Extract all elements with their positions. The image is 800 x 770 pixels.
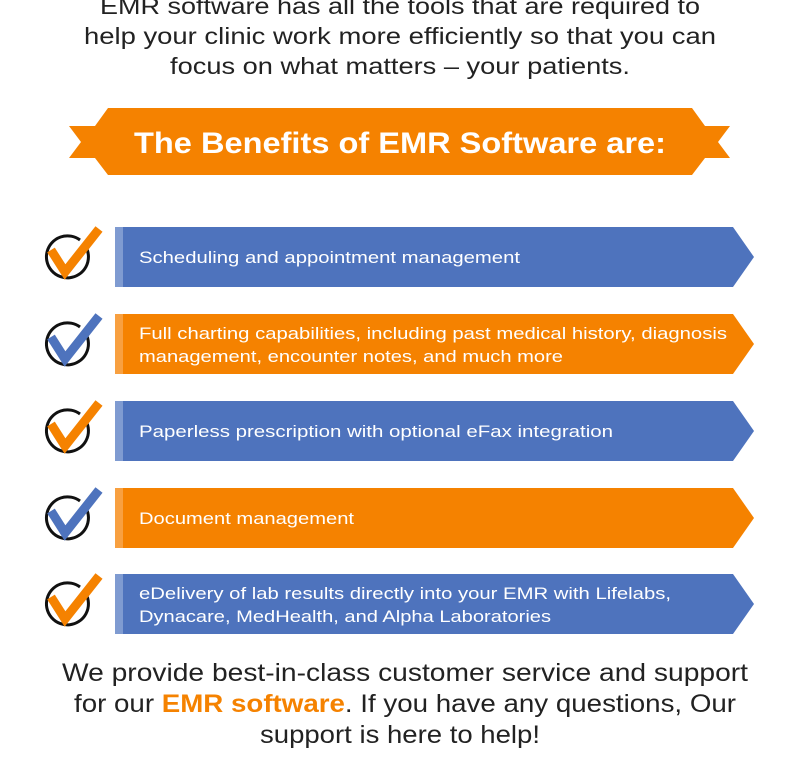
closing text: for our EMR software . If you have any questions, Our	[74, 690, 736, 718]
icon: check blue	[46, 316, 99, 365]
item 2	[46, 314, 754, 374]
item 2: Full charting capabilities, including past medical history, diagnosis	[139, 324, 727, 343]
item 1: Scheduling and appointment management	[139, 248, 520, 267]
closing text: support is here to help!	[260, 721, 540, 749]
item 4	[46, 488, 754, 548]
icon: check blue	[46, 490, 99, 539]
item 4: Document management	[139, 509, 354, 528]
closing text: We provide best-in-class customer service and support	[62, 659, 748, 687]
icon: check orange	[46, 403, 99, 452]
icon: check orange	[46, 229, 99, 278]
item 3: Paperless prescription with optional eFax integration	[139, 422, 613, 441]
item 3	[46, 401, 754, 461]
intro text	[84, 0, 716, 79]
item 1	[46, 227, 754, 287]
title banner: The Benefits of EMR Software are:	[134, 127, 666, 160]
item 2: management, encounter notes, and much more	[139, 347, 563, 366]
closing text	[62, 659, 748, 749]
intro text: help your clinic work more efficiently so that you can	[84, 23, 716, 49]
icon: check orange	[46, 576, 99, 625]
item 5: eDelivery of lab results directly into your EMR with Lifelabs,	[139, 584, 671, 603]
item 5: Dynacare, MedHealth, and Alpha Laboratories	[139, 607, 551, 626]
intro text: focus on what matters – your patients.	[170, 53, 630, 79]
item 5	[46, 574, 754, 634]
title banner	[69, 108, 730, 175]
